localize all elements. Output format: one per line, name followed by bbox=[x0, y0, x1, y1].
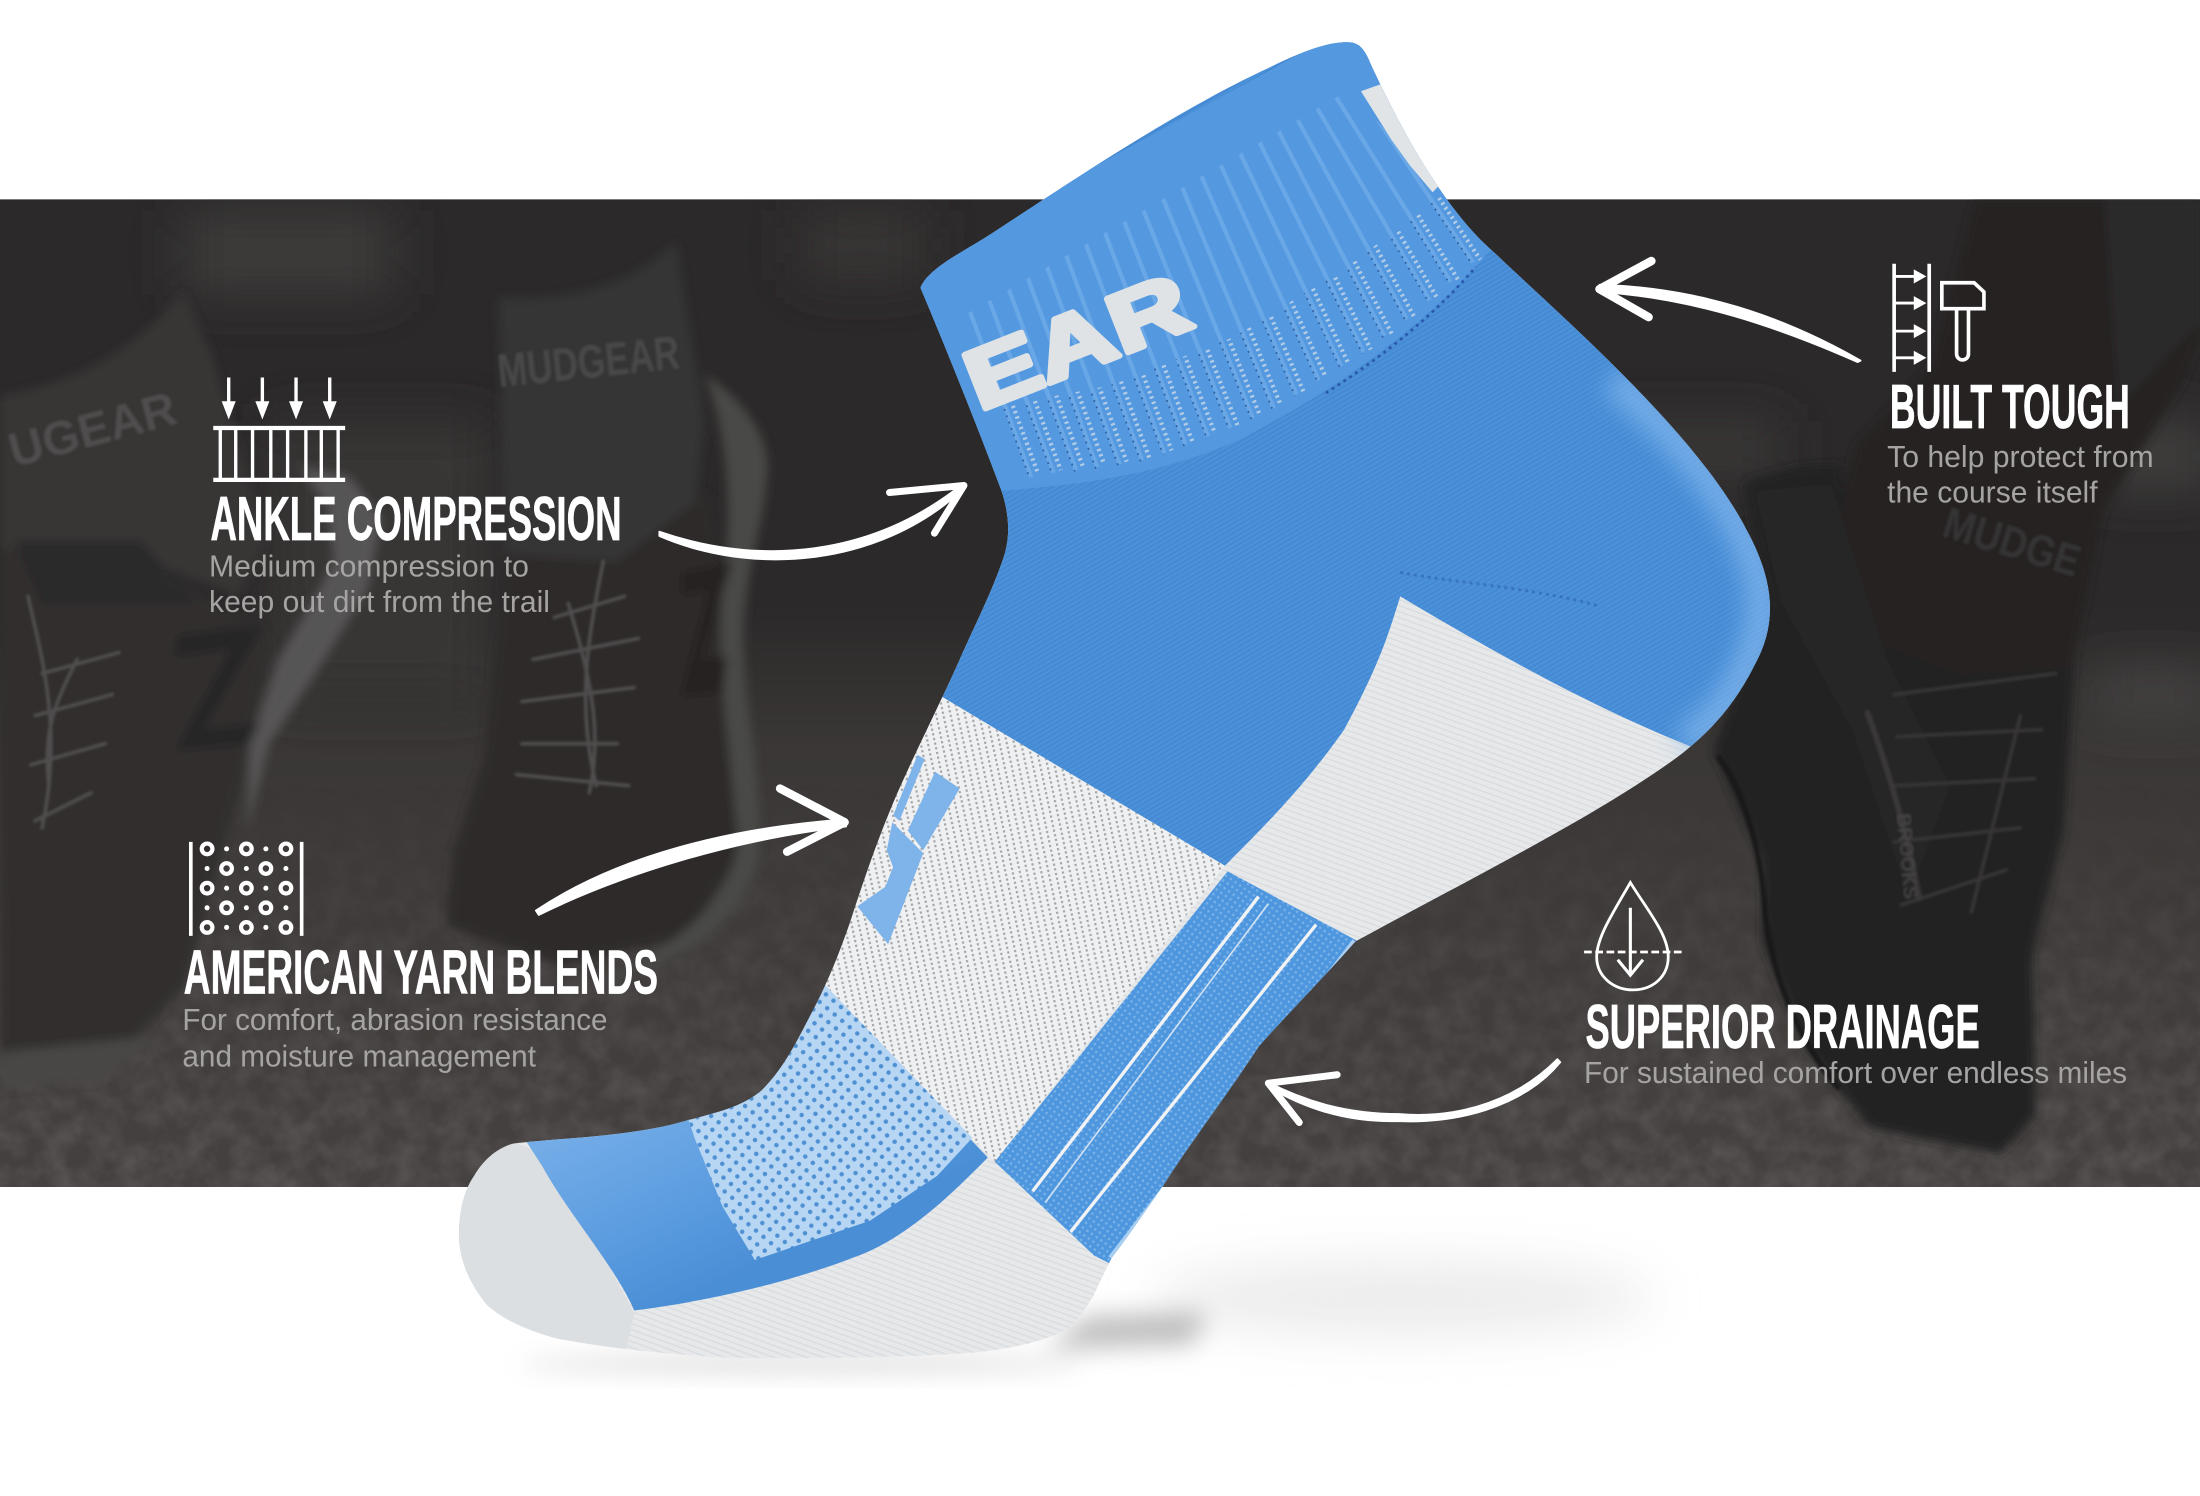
shoe laces bbox=[28, 561, 2055, 1087]
photo band background bbox=[0, 199, 2200, 1187]
icon: yarn dots bbox=[191, 842, 302, 936]
icon: compression arrows on ribbed cuff bbox=[213, 377, 345, 480]
callout: superior drainage bbox=[1584, 883, 2127, 1090]
blue body bbox=[920, 42, 1770, 866]
cuff bbox=[912, 28, 1501, 491]
ground bbox=[0, 682, 2200, 1187]
description: For sustained comfort over endless miles bbox=[1584, 1057, 2127, 1090]
background blotches bbox=[182, 210, 2200, 716]
left runner shoes bbox=[0, 199, 2200, 1153]
icon: wall and hammer bbox=[1894, 264, 1984, 372]
toe mesh panel bbox=[685, 982, 972, 1260]
midsole light bbox=[247, 466, 382, 831]
callout: ankle compression bbox=[209, 377, 622, 619]
midfoot blue logo bbox=[857, 755, 960, 944]
sock lettering in the photo: UGEAR bbox=[3, 382, 182, 478]
far right leg and shoe bbox=[1839, 199, 2200, 675]
heel and sole base bbox=[459, 49, 1770, 1358]
heel shading bbox=[1614, 379, 1763, 744]
description bbox=[182, 1004, 608, 1073]
shoe right bbox=[446, 491, 758, 965]
cuff lettering: EAR bbox=[951, 255, 1203, 428]
description: Medium compression to bbox=[209, 551, 529, 584]
callout: american yarn blends bbox=[182, 842, 658, 1073]
ground shadow under sock bbox=[519, 1261, 1656, 1371]
description: and moisture management bbox=[182, 1040, 537, 1073]
arch stripes bbox=[995, 871, 1361, 1270]
description: keep out dirt from the trail bbox=[209, 586, 550, 619]
heading: AMERICAN YARN BLENDS bbox=[184, 937, 658, 1007]
description: the course itself bbox=[1887, 476, 2098, 509]
arrow: american yarn blends bbox=[536, 789, 846, 915]
sock lettering in the photo: MUDGEAR bbox=[495, 326, 682, 398]
description: For comfort, abrasion resistance bbox=[182, 1004, 608, 1037]
description bbox=[209, 551, 550, 619]
cuff logo fragment bbox=[1361, 84, 1438, 192]
sock lettering in the photo: MUDGE bbox=[1938, 497, 2087, 587]
arrow: ankle compression bbox=[659, 484, 964, 559]
toe cap bbox=[459, 1144, 634, 1349]
sock right bbox=[498, 241, 704, 575]
heading: ANKLE COMPRESSION bbox=[210, 484, 622, 554]
heel pocket seam bbox=[1400, 572, 1599, 606]
sock lettering in the photo bbox=[3, 326, 2087, 900]
midfoot white panel bbox=[825, 697, 1225, 1162]
description bbox=[1887, 441, 2154, 509]
icon: water drop with arrow bbox=[1584, 883, 1685, 990]
callout: built tough bbox=[1887, 264, 2154, 509]
sock lettering in the photo: BROOKS bbox=[1892, 812, 1921, 900]
sock illustration bbox=[458, 42, 1770, 1358]
description: To help protect from bbox=[1887, 441, 2154, 474]
arrow: built tough bbox=[1599, 261, 1860, 362]
sock left bbox=[0, 292, 267, 596]
shoe left bbox=[0, 558, 249, 1052]
arrow: superior drainage bbox=[1267, 1059, 1560, 1122]
toe blue panel bbox=[505, 982, 988, 1310]
